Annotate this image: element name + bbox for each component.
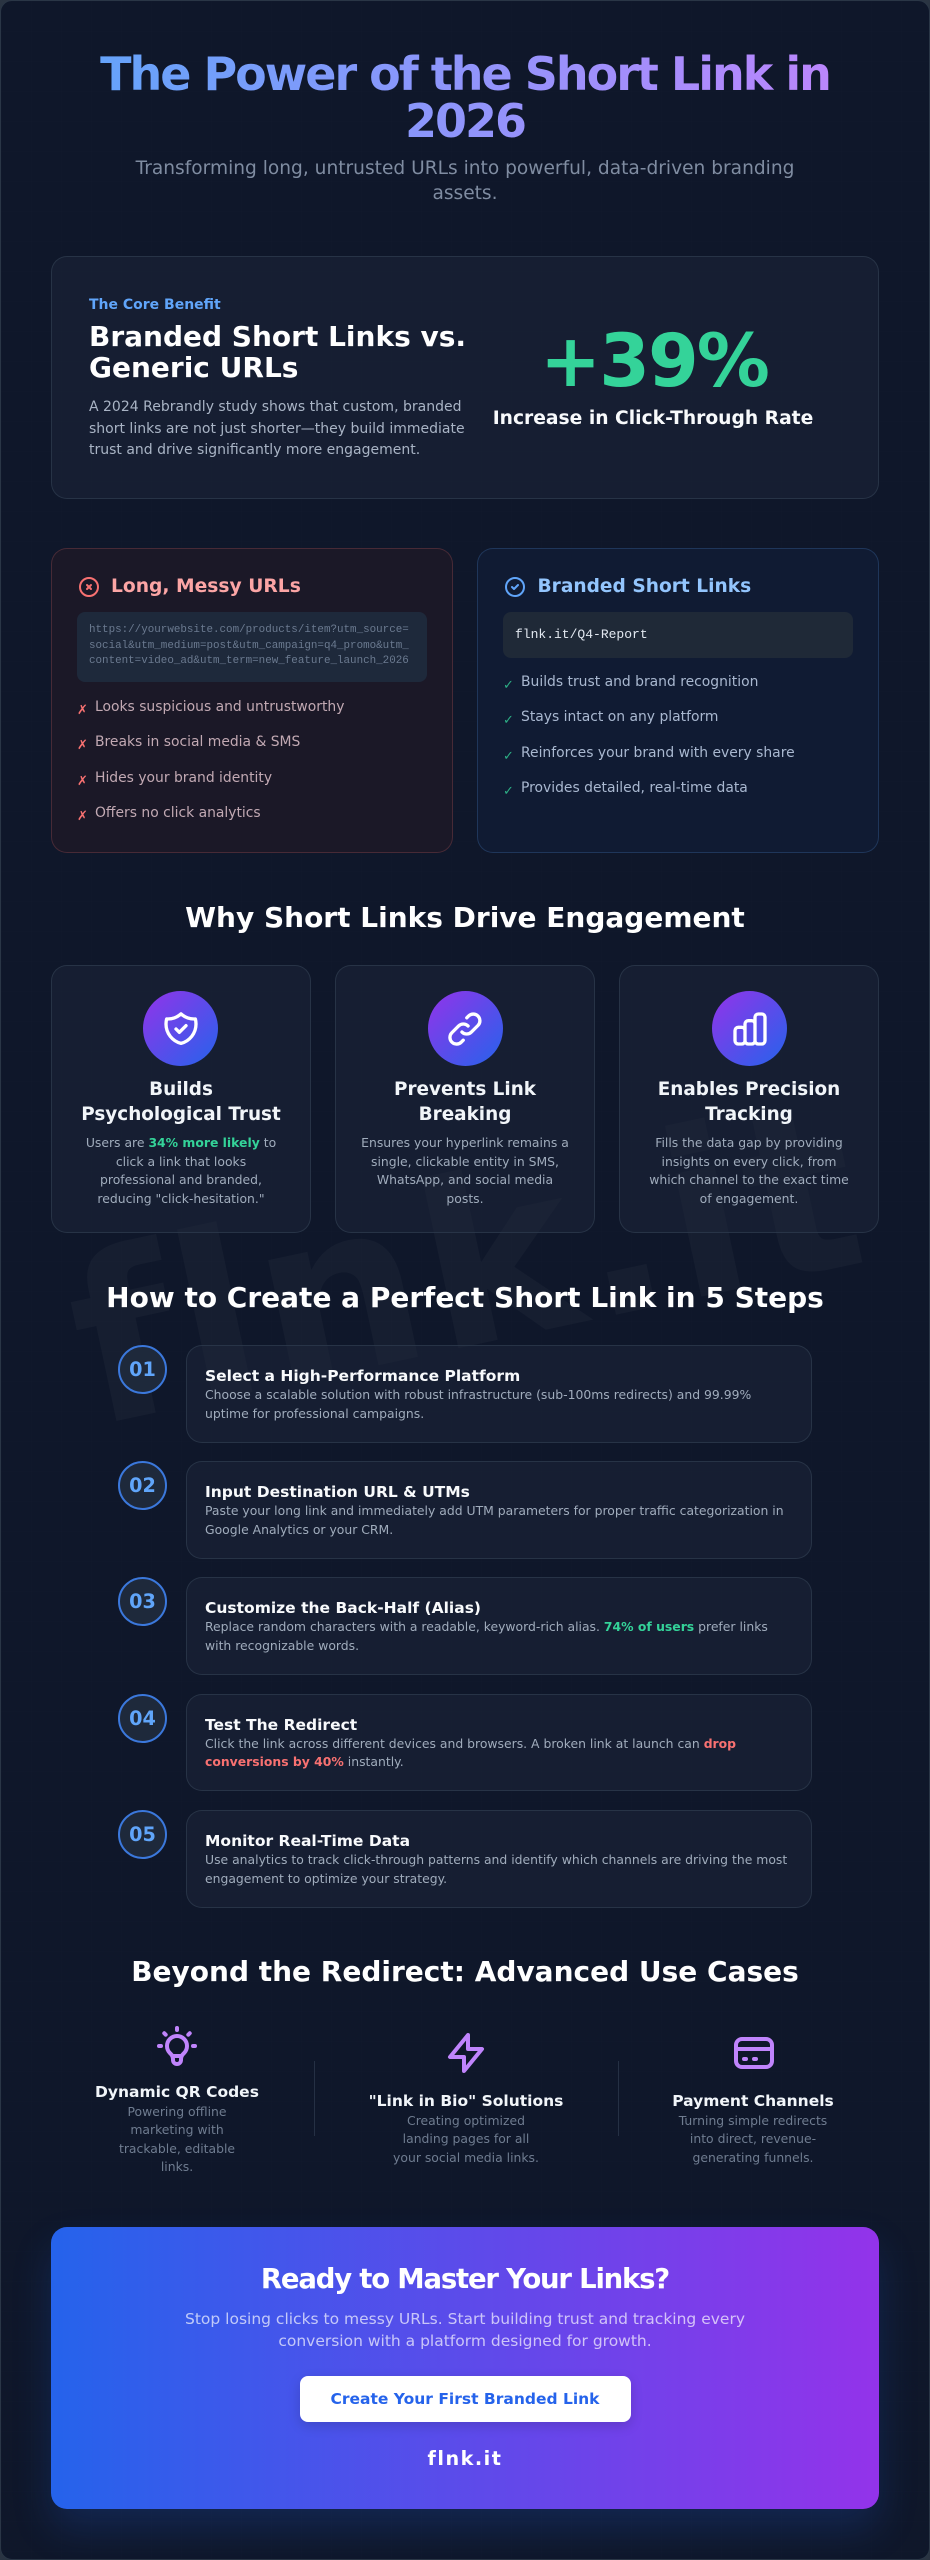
subtitle: assets. [432,182,498,204]
benefit description: trust and drive significantly more engagement. [89,442,420,458]
cta button [300,2376,630,2422]
use case text: links. [161,2159,193,2174]
title: 2026 [405,94,525,148]
item: Hides your brand identity [95,770,272,786]
step text 4: Click the link across different devices and browsers. A broken link at launch can drop [205,1736,736,1750]
benefit description: short links are not just shorter—they build immediate [89,421,465,437]
feature title: Prevents Link [394,1078,536,1100]
use case text [119,2104,235,2174]
use case title: Payment Channels [672,2092,834,2110]
feature text [649,1135,849,1206]
icon: bar chart [712,991,787,1066]
item: Looks suspicious and untrustworthy [95,698,344,714]
list: drawbacks [77,698,344,824]
icon: x circle [79,577,99,597]
benefit heading: Branded Short Links vs. [89,320,466,353]
feature text [361,1135,569,1206]
watermark: flnk.it: flnk.it [49,1052,886,1480]
feature text: Ensures your hyperlink remains a [361,1135,569,1150]
step text 5 [205,1852,787,1886]
feature title: Psychological Trust [81,1104,281,1124]
use case text [678,2112,827,2165]
step text 2: Paste your long link and immediately add UTM parameters for proper traffic categorization in [205,1503,784,1518]
feature text: single, clickable entity in SMS, [371,1154,559,1169]
item: Stays intact on any platform [521,709,718,725]
benefit description [89,399,465,458]
step badge 02 [118,1461,167,1510]
step title 5: Monitor Real-Time Data [205,1832,410,1850]
step badge 03 [118,1577,167,1626]
heading: advanced use cases: Beyond the Redirect: Advanced Use Cases [131,1955,799,1988]
step text 3: with recognizable words. [205,1638,359,1653]
title: The Power of the Short Link in [100,47,830,101]
feature text: WhatsApp, and social media [377,1172,553,1187]
stat caption: Increase in Click-Through Rate [493,408,813,428]
step text 1: Choose a scalable solution with robust infrastructure (sub-100ms redirects) and 99.99% [205,1387,751,1402]
step text 3: Replace random characters with a readable, keyword-rich alias. 74% of users prefer links [205,1619,768,1634]
item: Provides detailed, real-time data [521,780,748,796]
feature title: Enables Precision [658,1078,840,1100]
code: long url: content=video_ad&utm_term=new_feature_launch_2026 [89,655,409,667]
code: short url [503,612,853,658]
item: ✗ [77,738,88,753]
step title 1: Select a High-Performance Platform [205,1367,520,1385]
benefit heading: Generic URLs [89,351,298,384]
step text 2: Google Analytics or your CRM. [205,1522,393,1537]
step card 1 [186,1345,812,1442]
step badge 05 [118,1810,167,1859]
use case text: Creating optimized [407,2112,525,2128]
icon: shield check [143,991,218,1066]
use case text: your social media links. [393,2150,539,2165]
step card 5 [186,1810,812,1908]
feature text: insights on every click, from [662,1154,836,1169]
icon: credit card [734,2037,774,2069]
step text 3 [205,1619,768,1653]
heading: Long, Messy URLs [111,576,301,597]
benefit description: A 2024 Rebrandly study shows that custom, branded [89,399,461,415]
panel: feature trust [51,965,311,1233]
feature text: reducing "click-hesitation." [97,1191,265,1206]
code: long url: social&utm_medium=post&utm_campaign=q4_promo&utm_ [89,640,409,652]
step text 4 [205,1736,736,1769]
step card 3 [186,1577,812,1674]
divider [314,2061,315,2136]
brand mark: flnk.it [428,2447,502,2470]
cta button: Create Your First Branded Link [330,2390,600,2408]
item: ✓ [503,749,514,764]
step badge 01: 01 [129,1358,156,1381]
item: ✗ [77,809,88,824]
icon: check circle [505,577,525,597]
panel: long messy urls [51,548,453,853]
feature text: of engagement. [700,1191,798,1206]
feature title [658,1078,840,1124]
eyebrow label: The Core Benefit [89,297,221,313]
step badge 05: 05 [129,1823,156,1846]
step badge 04 [118,1694,167,1742]
cta text: conversion with a platform designed for growth. [278,2332,652,2350]
use case title: "Link in Bio" Solutions [369,2092,563,2110]
cta heading: Ready to Master Your Links? [261,2263,669,2295]
use case text [393,2112,539,2165]
step badge 03: 03 [129,1590,156,1613]
use case text: trackable, editable [119,2141,235,2156]
panel: branded short links [477,548,879,853]
icon: light bulb [157,2026,197,2066]
feature text: which channel to the exact time [649,1172,849,1187]
use case text: into direct, revenue- [690,2131,816,2146]
feature text: Users are 34% more likely to [86,1135,276,1150]
feature title [394,1078,536,1124]
item: ✗ [77,702,88,718]
item: ✓ [503,784,514,799]
use case text: landing pages for all [403,2131,529,2146]
item: ✓ [503,713,514,728]
panel: core benefit [51,256,879,499]
title [51,51,879,145]
feature text: posts. [446,1191,484,1206]
step text 2 [205,1503,784,1537]
item: ✓ [503,678,514,692]
step title 2: Input Destination URL & UTMs [205,1483,470,1501]
step text 5: engagement to optimize your strategy. [205,1871,447,1886]
step text 4: conversions by 40% instantly. [205,1754,404,1769]
subtitle [136,158,794,204]
panel: feature tracking [619,965,879,1233]
divider [618,2061,619,2136]
cta text: Stop losing clicks to messy URLs. Start building trust and tracking every [185,2310,745,2328]
code: long url [77,612,427,682]
heading: 5 steps: How to Create a Perfect Short Link in 5 Steps [106,1281,824,1314]
icon: link [428,991,502,1066]
code: short url: flnk.it/Q4-Report [515,627,648,642]
item: Offers no click analytics [95,805,261,821]
item: Breaks in social media & SMS [95,734,300,750]
feature title: Tracking [705,1104,793,1124]
use case title: Dynamic QR Codes [95,2083,259,2101]
heading: why short links: Why Short Links Drive Engagement [185,901,745,934]
use case text: Powering offline [127,2104,227,2118]
step text 5: Use analytics to track click-through patterns and identify which channels are driving the most [205,1852,787,1867]
heading: Branded Short Links [538,576,751,597]
stat: +39%: +39% [540,319,768,404]
step badge 04: 04 [129,1706,156,1730]
step text 1: uptime for professional campaigns. [205,1406,424,1421]
feature text: Fills the data gap by providing [655,1135,843,1150]
use case text: generating funnels. [692,2150,814,2165]
step text 1 [205,1387,751,1421]
use case text: marketing with [130,2122,224,2137]
code: long url: https://yourwebsite.com/products/item?utm_source= [89,624,409,636]
step card 2 [186,1461,812,1558]
panel: call to action [51,2227,879,2509]
feature text: professional and branded, [100,1172,262,1187]
panel: feature link [335,965,595,1233]
item: ✗ [77,774,88,789]
use case text: Turning simple redirects [679,2112,827,2128]
feature text [86,1135,276,1206]
benefit heading [89,320,466,384]
feature title [81,1078,281,1124]
subtitle: Transforming long, untrusted URLs into powerful, data-driven branding [136,158,794,178]
item: Reinforces your brand with every share [521,745,795,761]
feature title: Breaking [419,1104,511,1124]
step card 4 [186,1694,812,1791]
step badge 02: 02 [129,1474,156,1497]
feature title: Builds [149,1078,213,1100]
step title 3: Customize the Back-Half (Alias) [205,1599,481,1617]
step badge 01 [118,1345,167,1394]
item: Builds trust and brand recognition [521,674,758,690]
feature text: click a link that looks [116,1154,246,1169]
step title 4: Test The Redirect [205,1716,357,1734]
list: benefits [503,674,795,799]
icon: lightning bolt [448,2033,484,2073]
cta text [185,2310,745,2350]
